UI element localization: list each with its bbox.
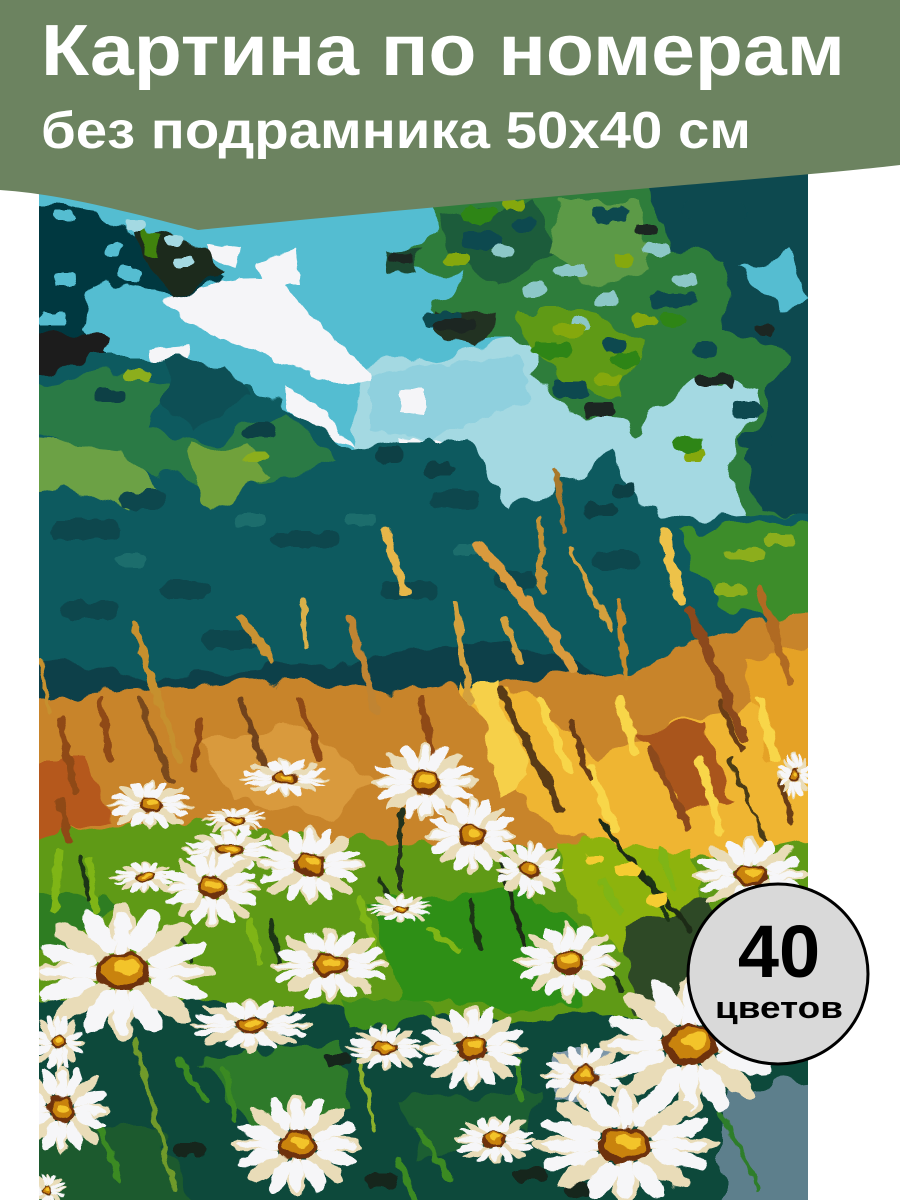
grass brush strokes [54, 700, 792, 1200]
badge label: цветов [715, 990, 843, 1025]
header banner [0, 0, 900, 230]
golden grass field [39, 612, 808, 859]
title: Картина по номерам [41, 11, 845, 91]
foreground foliage [0, 1000, 850, 1200]
subtitle: без подрамника 50х40 см [41, 102, 751, 160]
daisies [12, 742, 812, 1200]
painting: meadow with daisies [39, 174, 808, 1200]
badge: 40 colours [688, 884, 868, 1064]
left tree holes [45, 215, 188, 320]
green meadow [0, 820, 850, 1020]
badge number: 40 [738, 910, 820, 993]
tree canopy: upper left [39, 202, 225, 377]
clouds [150, 245, 530, 460]
forest dabs [60, 375, 790, 640]
canopy paint dabs [395, 205, 770, 455]
tree canopy: upper right [386, 174, 808, 520]
sky [39, 194, 760, 524]
distant tree line [39, 352, 808, 702]
wheat stalks [40, 470, 790, 1190]
